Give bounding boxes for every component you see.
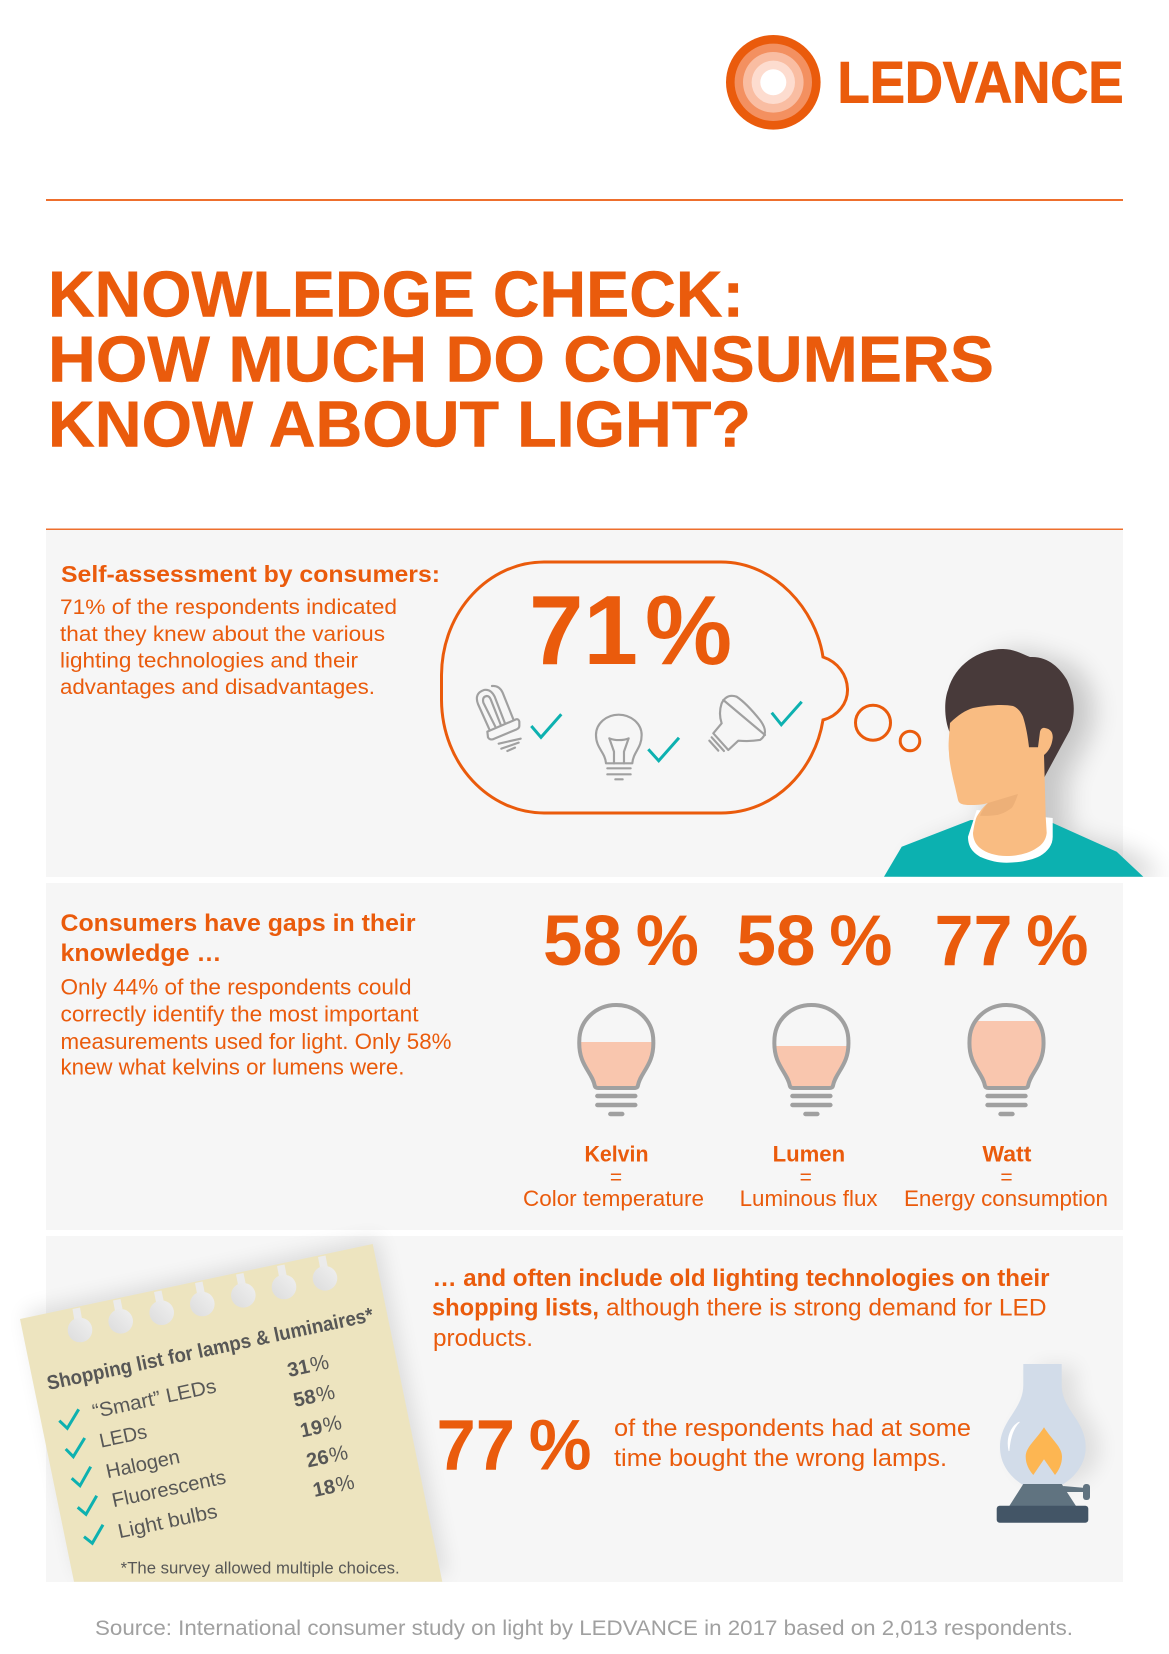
label: kelvin: Color temperature: [523, 1186, 704, 1211]
list check marks: [59, 1409, 103, 1543]
label: watt: Watt: [982, 1142, 1032, 1167]
icon: light bulb: [596, 715, 642, 779]
list percentages: [285, 1351, 357, 1502]
label: watt: =: [1000, 1166, 1013, 1189]
hair: [945, 649, 1074, 778]
text block: knowledge gaps: measurements used for light. Only 58%: [60, 1029, 452, 1054]
check mark: [648, 738, 679, 761]
stat: kelvin: [523, 902, 704, 1211]
check mark: [531, 714, 561, 737]
text block: self-assessment: that they knew about the various: [60, 623, 385, 646]
stat: 71 percent: 71%: [529, 575, 732, 685]
title: KNOW ABOUT LIGHT?: [48, 388, 751, 461]
collar: [968, 810, 1053, 863]
list items: Halogen: [104, 1446, 182, 1483]
list heading: Shopping list for lamps & luminaires*: [45, 1304, 375, 1395]
logo: [726, 35, 1124, 130]
source line: Source: International consumer study on light by LEDVANCE in 2017 based on 2,013 respondents.: [95, 1616, 1073, 1640]
chin shadow: [980, 794, 1018, 816]
title: HOW MUCH DO CONSUMERS: [48, 323, 994, 396]
label: lumen: =: [800, 1166, 812, 1189]
stat: lumen: 58 %: [736, 902, 892, 981]
footnote: *The survey allowed multiple choices.: [121, 1559, 400, 1577]
icon: bulb 58 percent: [579, 1005, 653, 1114]
text block: shopping lists: shopping lists,: [432, 1295, 599, 1322]
face and neck: [949, 705, 1053, 856]
icon: reflector lamp: [709, 696, 765, 751]
title: KNOWLEDGE CHECK:: [48, 258, 744, 331]
shirt: [884, 820, 1143, 877]
text block: knowledge gaps: [60, 974, 452, 1079]
text block: knowledge gaps: Only 44% of the respondents could: [60, 974, 412, 999]
text block: self-assessment: advantages and disadvantages.: [60, 676, 375, 699]
panel: self-assessment: [46, 530, 1163, 880]
stat: watt: 77 %: [934, 902, 1088, 981]
label: lumen: Luminous flux: [740, 1186, 878, 1211]
text block: knowledge gaps: knew what kelvins or lumens were.: [60, 1054, 404, 1079]
logo: LEDVANCE: [838, 51, 1124, 116]
stat: lumen: [736, 902, 892, 1211]
thought bubble: [442, 562, 920, 813]
icon: bulb 58 percent: [774, 1005, 848, 1114]
label: kelvin: =: [610, 1166, 622, 1189]
icon: compact fluorescent lamp: [477, 686, 521, 751]
icon: bulb 77 percent: [969, 1005, 1044, 1114]
text block: shopping lists: [432, 1265, 1050, 1352]
heading: knowledge gaps: [60, 910, 416, 967]
panel: knowledge gaps: [46, 883, 1123, 1230]
label: lumen: Lumen: [773, 1142, 845, 1167]
text block: self-assessment: lighting technologies and their: [60, 650, 358, 673]
list items: “Smart” LEDs: [90, 1375, 218, 1423]
text block: shopping lists: … and often include old lighting technologies on their: [432, 1265, 1050, 1292]
label: watt: Energy consumption: [904, 1186, 1108, 1211]
icon: oil lamp: [997, 1364, 1100, 1523]
label: lumen: [740, 1142, 878, 1211]
list items: Fluorescents: [110, 1467, 228, 1512]
person illustration: [884, 649, 1163, 880]
list percentages: 18%: [311, 1471, 357, 1502]
heading: knowledge gaps: Consumers have gaps in their: [60, 910, 416, 937]
list percentages: 26%: [304, 1441, 350, 1472]
list percentages: 58%: [291, 1381, 337, 1412]
list items: LEDs: [97, 1421, 149, 1453]
label: watt: [904, 1142, 1108, 1211]
check mark: [772, 702, 802, 725]
stat: watt: [904, 902, 1108, 1211]
text block: wrong lamps: [614, 1415, 971, 1472]
text block: self-assessment: [60, 596, 397, 699]
text block: knowledge gaps: correctly identify the most important: [60, 1002, 419, 1027]
label: kelvin: [523, 1142, 704, 1211]
list items: Light bulbs: [116, 1501, 219, 1543]
title: [48, 258, 994, 461]
list percentages: 19%: [298, 1411, 344, 1442]
text block: shopping lists: although there is strong demand for LED: [606, 1295, 1046, 1322]
stat: 77 percent wrong lamps: 77 %: [436, 1406, 592, 1485]
text block: wrong lamps: of the respondents had at some: [614, 1415, 971, 1442]
list percentages: 31%: [285, 1351, 331, 1382]
heading: self-assessment: Self-assessment by consumers:: [61, 561, 440, 587]
text block: wrong lamps: time bought the wrong lamps.: [614, 1445, 947, 1472]
list items: [90, 1375, 228, 1543]
heading: knowledge gaps: knowledge …: [60, 940, 222, 967]
label: kelvin: Kelvin: [584, 1142, 648, 1167]
stat: kelvin: 58 %: [543, 902, 699, 981]
text block: self-assessment: 71% of the respondents indicated: [60, 596, 397, 619]
panel: shopping lists: [20, 1236, 1123, 1582]
text block: shopping lists: products.: [433, 1325, 533, 1352]
note paper: shopping list: [20, 1237, 447, 1582]
